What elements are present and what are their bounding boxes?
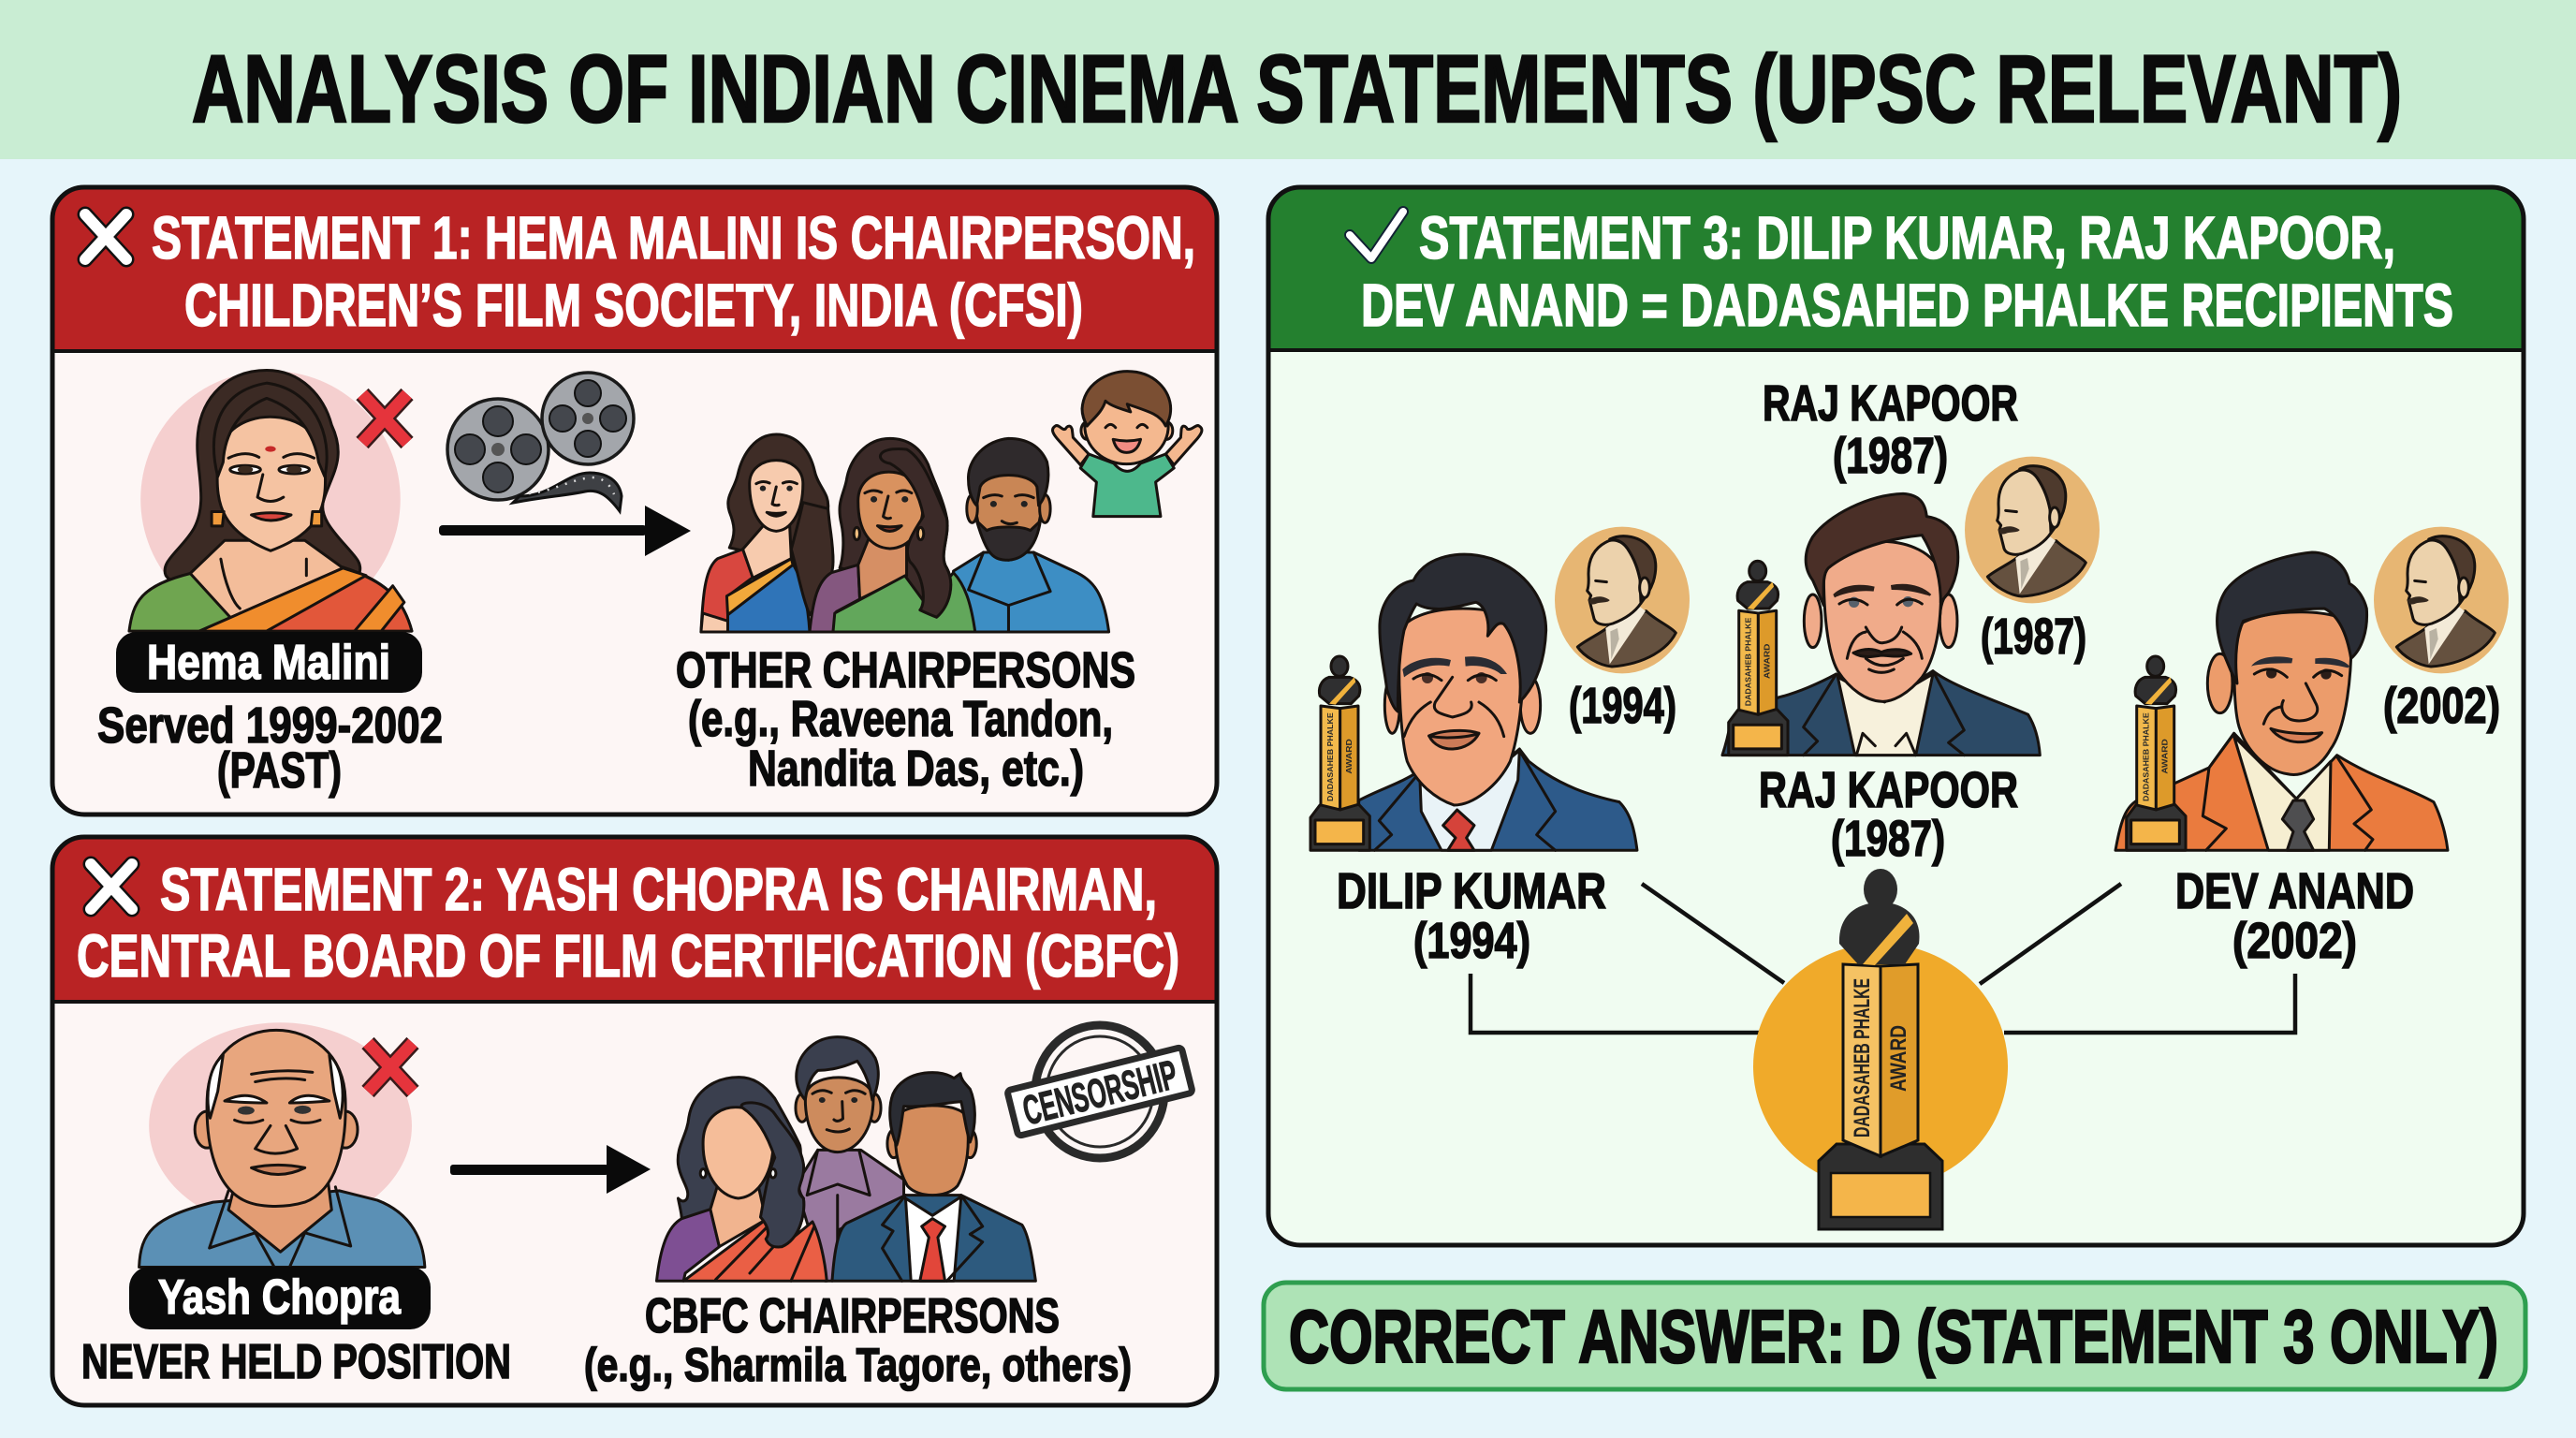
trophy: Dilip Kumar: AWARD [1345,739,1354,774]
label: Raj Kapoor centre: RAJ KAPOOR [1759,762,2018,818]
trophy: Dev Anand: AWARD [2161,739,2170,774]
trophy: Raj Kapoor: DADASAHEB PHALKE [1745,617,1753,706]
statement 1 heading: CHILDREN’S FILM SOCIETY, INDIA (CFSI) [184,271,1083,339]
portrait: Hema Malini [129,371,412,631]
served dates [97,697,443,799]
panel: statement 1 [52,187,1217,814]
panel: statement 2 [52,837,1217,1405]
top label: Raj Kapoor [1763,375,2018,484]
name pill: Hema Malini: Hema Malini [147,636,390,690]
CBFC chairpersons label: (e.g., Sharmila Tagore, others) [584,1339,1132,1391]
label: Dilip Kumar: DILIP KUMAR [1337,863,1606,919]
year labels beside medallions [1569,609,2500,734]
label: Dev Anand: DEV ANAND [2175,863,2414,919]
illustration: other chairpersons [701,372,1202,632]
statement 2 heading [77,856,1179,990]
connector lines [1471,884,2295,1033]
label: Dilip Kumar [1337,863,1606,969]
other chairpersons label: (e.g., Raveena Tandon, [688,691,1113,747]
trophy: Dilip Kumar [1310,656,1369,850]
portrait: Raj Kapoor [1722,493,2040,756]
arrow: statement 2 [450,1145,651,1194]
statement 2 header bar [52,837,1217,1002]
illustration: CBFC chairpersons [656,1037,1035,1281]
medallion: Dev Anand [2374,527,2509,673]
statement 2 heading: STATEMENT 2: YASH CHOPRA IS CHAIRMAN, [160,856,1157,923]
icon: red cross [362,394,407,443]
portrait: Dilip Kumar [1359,554,1637,850]
title band [0,0,2576,159]
statement 1 heading [152,204,1195,339]
never held position: NEVER HELD POSITION [81,1335,511,1389]
label: Raj Kapoor centre [1759,762,2018,867]
Dadasaheb Phalke award trophy [1753,869,2008,1229]
served dates: Served 1999-2002 [97,697,443,754]
served dates: (PAST) [217,742,342,799]
icon: white cross 1 [85,214,126,259]
top label: Raj Kapoor: (1987) [1833,428,1948,484]
Dadasaheb Phalke award trophy: AWARD [1886,1025,1911,1092]
other chairpersons label [676,642,1135,797]
statement 1 heading: STATEMENT 1: HEMA MALINI IS CHAIRPERSON, [152,204,1195,271]
portrait: Yash Chopra [139,1022,425,1268]
statement 3 header bar [1268,187,2524,350]
label: Raj Kapoor centre: (1987) [1831,811,1945,867]
other chairpersons label: Nandita Das, etc.) [748,741,1084,797]
portrait: Dev Anand [2115,552,2448,850]
trophy: Raj Kapoor: AWARD [1764,643,1772,679]
statement 2 heading: CENTRAL BOARD OF FILM CERTIFICATION (CBFC) [77,922,1179,990]
top label: Raj Kapoor: RAJ KAPOOR [1763,375,2018,432]
Dadasaheb Phalke award trophy: DADASAHEB PHALKE [1850,978,1875,1137]
trophy: Dev Anand [2127,656,2186,850]
medallion: Raj Kapoor [1965,457,2100,603]
icon: censorship stamp: CENSORSHIP [1018,1051,1182,1135]
medallion: Dilip Kumar [1555,527,1690,673]
year labels beside medallions: (1987) [1981,609,2086,665]
icon: film reels [447,373,634,511]
icon: censorship stamp [1007,1025,1193,1158]
label: Dev Anand [2175,863,2414,969]
name pill: Yash Chopra: Yash Chopra [158,1270,402,1325]
label: Dilip Kumar: (1994) [1413,913,1530,969]
other chairpersons label: OTHER CHAIRPERSONS [676,642,1135,698]
statement 1 header bar [52,187,1217,351]
arrow: statement 1 [439,506,691,556]
trophy: Dilip Kumar: DADASAHEB PHALKE [1326,712,1335,801]
statement 3 heading [1361,204,2453,339]
year labels beside medallions: (2002) [2383,678,2500,734]
trophy: Dev Anand: DADASAHEB PHALKE [2143,712,2151,801]
panel: statement 3 [1268,187,2524,1245]
year labels beside medallions: (1994) [1569,678,1676,734]
icon: white cross 2 [91,864,132,909]
label: Dev Anand: (2002) [2232,913,2357,969]
CBFC chairpersons label: CBFC CHAIRPERSONS [645,1289,1060,1343]
icon: red cross 2 [368,1043,413,1092]
CBFC chairpersons label [584,1289,1132,1391]
icon: check mark [1350,212,1403,258]
trophy: Raj Kapoor [1729,561,1788,756]
